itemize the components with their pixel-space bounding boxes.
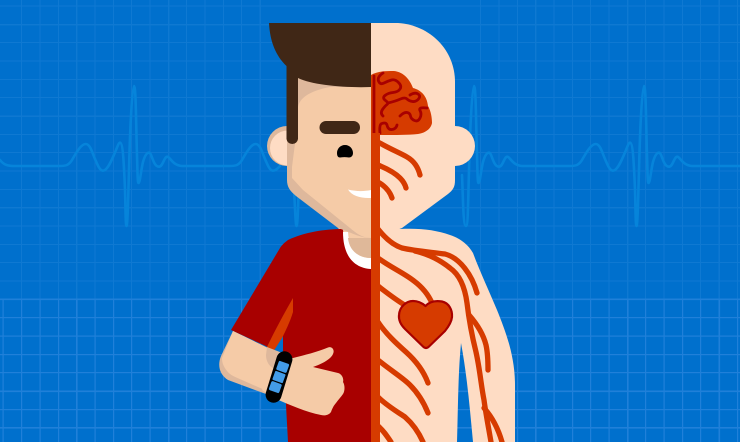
- face: [292, 87, 371, 238]
- hand with thumb: [262, 347, 344, 415]
- red t-shirt: [231, 229, 371, 442]
- neck: [338, 226, 371, 262]
- eye: [337, 145, 353, 158]
- left ear: [267, 126, 307, 166]
- heart: [399, 301, 452, 348]
- orange sleeve fold: [267, 298, 293, 352]
- central nerve trunk: [371, 133, 380, 442]
- arm and hand: [219, 331, 344, 415]
- ecg heartbeat line: [0, 86, 740, 226]
- forearm: [222, 331, 282, 391]
- fitness band: [264, 349, 294, 405]
- wrist shadow: [266, 347, 285, 369]
- bare torso: [371, 225, 515, 442]
- bare head: [371, 23, 455, 240]
- hair: [269, 23, 371, 144]
- right ear: [435, 126, 475, 166]
- arm shadow: [219, 331, 272, 394]
- brain: [371, 71, 432, 135]
- eyebrow: [320, 121, 360, 134]
- brain folds: [374, 73, 427, 133]
- head veins: [378, 142, 502, 442]
- blue gap under sleeve: [272, 336, 283, 353]
- white collar: [343, 232, 371, 269]
- man: left half (clothed): [231, 23, 371, 442]
- face shadow: [287, 60, 371, 238]
- smile: [348, 190, 371, 198]
- body veins: [378, 229, 477, 293]
- band screen: [269, 361, 289, 393]
- anatomy: right half: [371, 23, 515, 442]
- neck shadow: [348, 238, 371, 258]
